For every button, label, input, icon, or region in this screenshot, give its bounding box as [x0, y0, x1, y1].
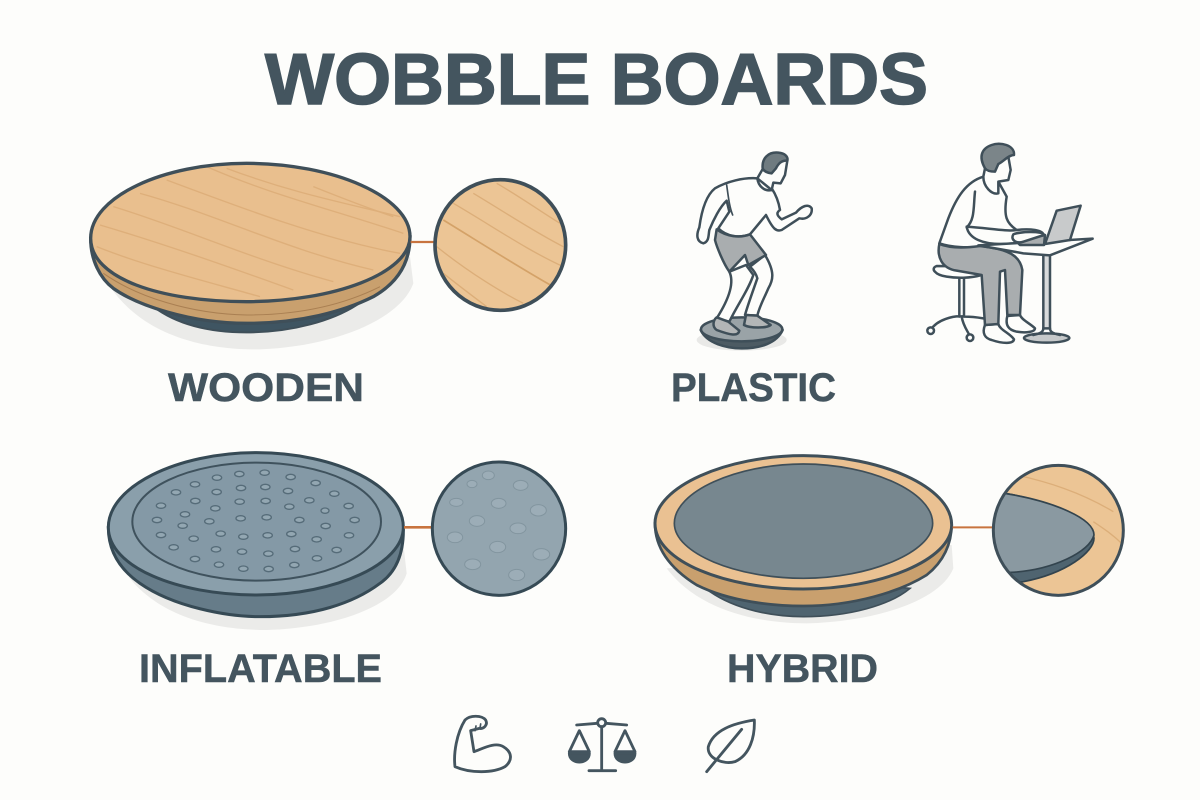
connector line: [953, 524, 993, 530]
panel: seated figure at desk: [927, 144, 1093, 343]
board shadow: [667, 545, 953, 623]
board side: [655, 523, 952, 606]
board top: [108, 453, 403, 595]
laptop and table top: [978, 206, 1093, 255]
board base: [710, 578, 910, 617]
panel: standing figure on board: [697, 153, 812, 351]
panel: hybrid board: [655, 456, 1123, 623]
label: plastic: PLASTIC: [671, 366, 836, 410]
board side: [108, 527, 403, 617]
connector line: [411, 238, 434, 245]
panel: inflatable board: [108, 453, 566, 630]
seated man: [939, 144, 1043, 343]
icon row: [455, 716, 754, 772]
standing man: [697, 153, 812, 335]
inner ring: [132, 463, 381, 581]
stool: [927, 266, 983, 341]
material detail circle: [987, 465, 1123, 595]
wood rim: [655, 456, 952, 589]
balance board: [697, 317, 787, 351]
wood detail circle: [435, 180, 566, 310]
texture detail circle: [432, 462, 566, 595]
board side: [91, 237, 410, 323]
icon: muscle: [455, 716, 510, 772]
board top: [91, 163, 410, 302]
icon: leaf: [707, 720, 754, 772]
label: inflatable: INFLATABLE: [139, 647, 382, 691]
connector line: [404, 523, 433, 531]
panel: wooden board: [91, 163, 566, 349]
raised bumps: [152, 470, 359, 572]
grey top: [674, 464, 933, 578]
desk: [1024, 255, 1069, 343]
title: WOBBLE BOARDS: [265, 40, 928, 120]
board shadow: [110, 257, 413, 349]
board base: [153, 297, 357, 332]
icon: balance scale: [569, 719, 635, 771]
label: hybrid: HYBRID: [727, 647, 878, 691]
board shadow: [128, 543, 407, 630]
label: wooden: WOODEN: [168, 366, 364, 410]
